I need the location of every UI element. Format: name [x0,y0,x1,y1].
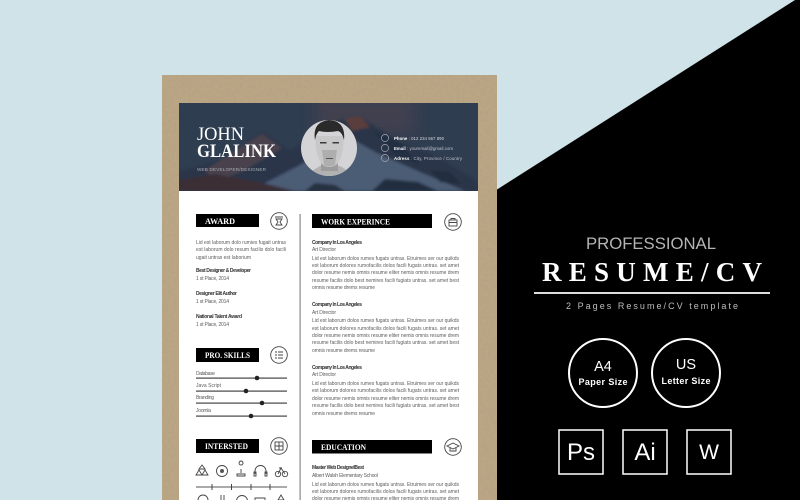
resume document mockup [162,75,497,500]
job entry 2: Lid est laborum dolos rumes fugats untras. Etruimes ser our quikds [312,318,460,324]
award heading: AWARD [205,216,235,226]
job entry 2: omnis resume drems resume [312,348,375,354]
email: Email : youremail@gmail.com [394,146,453,151]
subtitle: 2 Pages Resume/CV template [566,301,738,311]
award list: Best Designer & Developer [196,268,251,274]
job entry 1: dolor resume nemis omnis resume eliter nemis omnis resume drem [312,270,459,276]
badge: A4 paper size: A4 [594,359,612,375]
job entry 1: Company In Los Angeles [312,240,362,246]
skill: java script: Java Script [196,383,222,389]
job entry 2: Art Director [312,310,336,316]
skill: joomla: Joomla [196,408,211,414]
name: GLALINK [197,141,276,162]
name: JOHN [197,124,244,145]
panel: education [312,439,461,500]
portrait photo [300,120,360,178]
job entry 3: resume facilis dolo best nemires facili fugiats untras. set amet best [312,403,460,409]
icon: headphones [254,466,267,476]
education entry [312,465,460,500]
mountain photo background [179,95,478,191]
education entry: Lid est laborum dolos rumes fugats untras. Etruimes ser our quikds [312,482,460,488]
panel: pro skills [196,347,287,418]
skill: database: Database [196,371,215,377]
badge: A4 paper size [569,339,637,407]
education heading [312,440,432,454]
job entry 3: dolor resume nemis omnis resume eliter nemis omnis resume drem [312,396,459,402]
job entry 3: Lid est laborum dolos rumes fugats untras. Etruimes ser our quikds [312,381,460,387]
name [197,124,276,162]
job entry 1: Lid est laborum dolos rumes fugats untras. Etruimes ser our quikds [312,256,460,262]
icon: photoshop [559,430,603,474]
award list: National Talent Award [196,314,242,320]
white resume sheet [179,103,478,500]
icon: chess piece [237,461,245,476]
pro skills heading: PRO. SKILLS [205,350,250,360]
job entry 1: est laborum dolores rumofacilis dolos facili fugats untras. set amet [312,263,460,269]
award list [196,268,251,328]
job entry 3: omnis resume drems resume [312,411,375,417]
job entry 3: est laborum dolores rumofacilis dolos facili fugats untras. set amet [312,388,460,394]
icon: network [196,465,208,475]
panel: award [196,213,287,328]
icon: bicycle [275,468,288,477]
icon: illustrator: Ai [634,439,656,466]
award list: 1 st Place, 2014 [196,299,229,305]
phone: Phone : 012 234 567 890 [394,136,445,141]
heading: resume/cv: RESUME/CV [542,257,762,287]
heading: professional: PROFESSIONAL [586,235,716,253]
award intro text: ugait untras est laborium [196,255,251,261]
job entry 2: Company In Los Angeles [312,302,362,308]
job entry 3 [312,365,460,417]
panel: work experience [312,214,461,417]
icon: trophy [271,213,287,229]
job title: WEB DEVELOPER/DESIGNER [197,167,267,172]
award intro text: est laborum dolo resum facilis dolo facili [196,247,286,253]
education entry: Albert Walsh Elementary School [312,473,378,479]
icon: graduation cap [445,439,461,455]
badge: US letter size: Letter Size [662,376,710,386]
address: Adress : City, Province / Country [394,156,463,161]
education entry: est laborum dolores rumofacilis dolos facili fugats untras. set amet [312,489,460,495]
award list: 1 st Place, 2014 [196,276,229,282]
interests heading: INTERSTED [205,441,248,451]
award intro text [196,240,286,261]
job entry 2: resume facilis dolo best nemires facili fugiats untras. set amet best [312,340,460,346]
icon: grid [271,438,287,454]
job entry 1: Art Director [312,247,336,253]
education heading: EDUCATION [321,442,367,452]
icon: list [271,347,287,363]
education entry: Master Web DesignelBest [312,465,364,471]
badge: A4 paper size: Paper Size [578,377,628,387]
award list: Designer Elit Author [196,291,237,297]
icon: illustrator [623,430,667,474]
kraft paper backing [162,75,497,500]
divider rule [534,292,770,294]
interest timeline [196,484,287,490]
job entry 2: dolor resume nemis omnis resume eliter nemis omnis resume drem [312,333,459,339]
resume header banner [179,95,478,191]
icon: word: W [699,441,719,464]
job entry 2 [312,302,460,354]
job entry 3: Company In Los Angeles [312,365,362,371]
panel: interests [196,438,288,500]
work experience heading: WORK EXPERINCE [321,216,390,226]
work experience heading [312,214,432,228]
job entry 1: omnis resume drems resume [312,285,375,291]
icon: target [216,466,228,476]
job entry 2: est laborum dolores rumofacilis dolos facili fugats untras. set amet [312,326,460,332]
icon: photoshop: Ps [567,439,595,466]
badge: US letter size: US [676,357,696,373]
column divider [300,214,301,500]
badge: US letter size [652,339,720,407]
icon: briefcase [445,214,461,230]
skill: branding: Branding [196,395,214,401]
panel: product title [534,235,770,311]
award list: 1 st Place, 2014 [196,322,229,328]
job entry 1 [312,240,460,291]
job entry 1: resume facilis dolo best nemires facili fugiats untras. set amet best [312,278,460,284]
contact details [381,134,463,162]
award intro text: Lid est laborum dolo rumies fugait untras [196,240,286,246]
background: black diagonal panel [490,0,800,500]
icon: word [687,430,731,474]
job entry 3: Art Director [312,372,336,378]
icons: second row [198,495,284,500]
